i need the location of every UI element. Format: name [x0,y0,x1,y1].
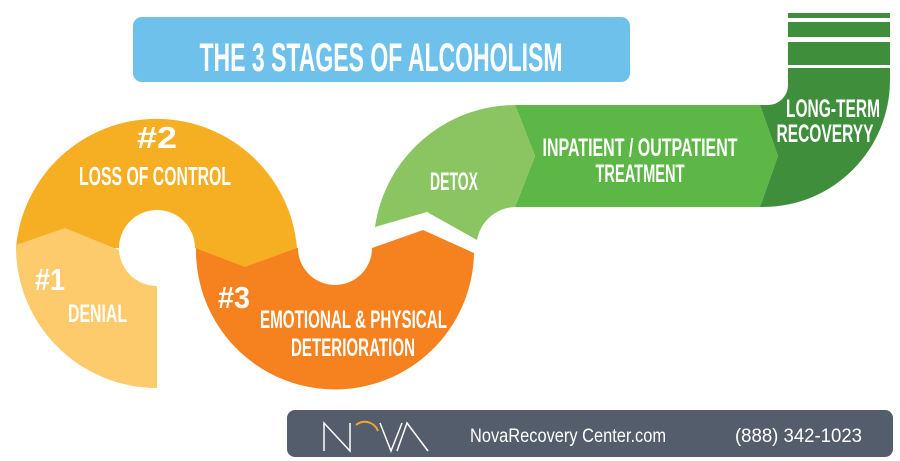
stage 3 orange segment [196,230,474,389]
footer bar [287,410,893,457]
stage 3 orange segment: DETERIORATION [291,334,415,362]
treatment segment: INPATIENT / OUTPATIENT [542,134,738,162]
stage 3 orange segment: EMOTIONAL & PHYSICAL [260,306,447,334]
title banner [133,17,630,82]
stage 1 denial segment: DENIAL [68,300,127,328]
stage 1 denial segment: #1 [35,262,65,297]
treatment segment: TREATMENT [596,160,684,188]
treatment segment [515,105,778,207]
stage 1 denial segment [16,228,157,388]
long-term recovery segment [760,13,890,207]
logo: NOVA [324,422,428,451]
stage 2 yellow arc: LOSS OF CONTROL [79,161,231,191]
stage 2 yellow arc: #2 [137,120,177,155]
title banner: THE 3 STAGES OF ALCOHOLISM [200,36,562,80]
detox segment [375,105,535,240]
stage 2 yellow arc [16,119,297,267]
footer bar: (888) 342-1023 [735,426,862,447]
footer bar: NovaRecovery Center.com [470,426,666,447]
detox segment: DETOX [430,168,478,196]
stage 3 orange segment: #3 [218,280,250,315]
